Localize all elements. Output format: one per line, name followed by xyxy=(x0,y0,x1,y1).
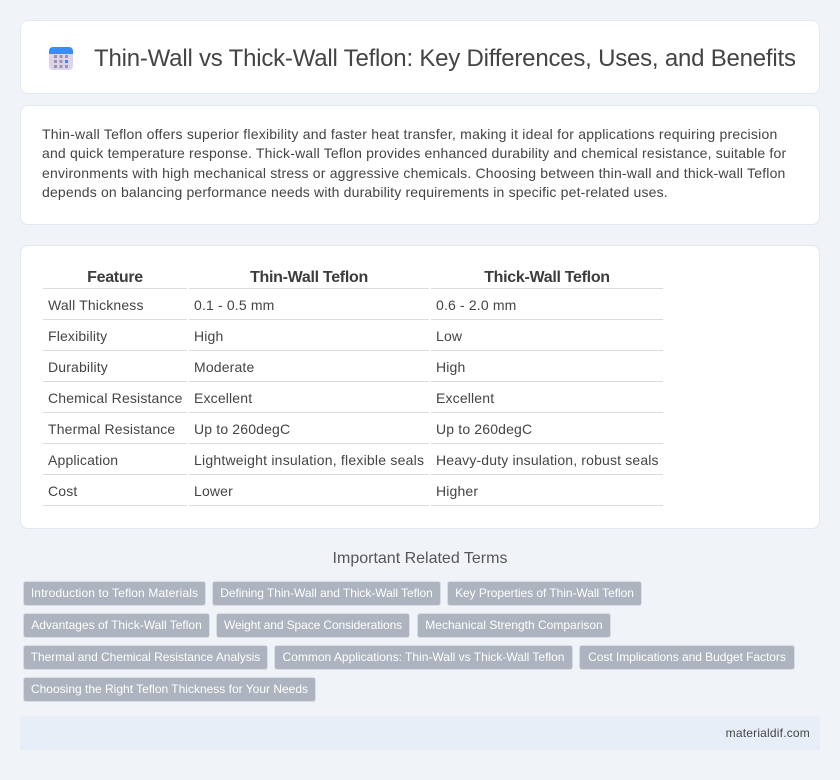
intro text: and quick temperature response. Thick-wall Teflon provides enhanced durability and chemical resistance, suitable for xyxy=(42,145,786,161)
comparison table: Feature xyxy=(87,269,143,286)
comparison table xyxy=(43,269,663,506)
title: Thin-Wall vs Thick-Wall Teflon: Key Differences, Uses, and Benefits xyxy=(94,45,796,72)
panel: title header xyxy=(20,20,820,94)
intro text: depends on balancing performance needs with durability requirements in specific pet-related uses. xyxy=(42,184,668,200)
related term tags: Weight and Space Considerations xyxy=(224,618,402,632)
related term tags: Common Applications: Thin-Wall vs Thick-Wall Teflon xyxy=(283,650,564,664)
comparison table: Up to 260degC xyxy=(194,421,290,437)
comparison table: 0.1 - 0.5 mm xyxy=(194,297,274,313)
comparison table: Moderate xyxy=(194,359,254,375)
related term tags xyxy=(23,581,795,702)
related term tags: Key Properties of Thin-Wall Teflon xyxy=(455,586,634,600)
comparison table: Lightweight insulation, flexible seals xyxy=(194,452,424,468)
intro text: Thin-wall Teflon offers superior flexibility and faster heat transfer, making it ideal for applications requiring precision xyxy=(42,126,777,142)
footer xyxy=(20,716,820,750)
related term tags: Choosing the Right Teflon Thickness for Your Needs xyxy=(31,682,308,696)
icon: calendar xyxy=(49,47,73,70)
panel: introduction xyxy=(20,105,820,225)
comparison table: 0.6 - 2.0 mm xyxy=(436,297,516,313)
related term tags: Cost Implications and Budget Factors xyxy=(588,650,786,664)
comparison table: Lower xyxy=(194,483,233,499)
comparison table: Heavy-duty insulation, robust seals xyxy=(436,452,659,468)
related term tags: Thermal and Chemical Resistance Analysis xyxy=(31,650,260,664)
comparison table: Thick-Wall Teflon xyxy=(484,269,610,286)
comparison table: Cost xyxy=(48,483,77,499)
comparison table: Durability xyxy=(48,359,108,375)
comparison table: Application xyxy=(48,452,118,468)
comparison table: Chemical Resistance xyxy=(48,390,183,406)
comparison table: High xyxy=(436,359,465,375)
comparison table: Excellent xyxy=(194,390,252,406)
heading: related terms: Important Related Terms xyxy=(333,550,507,567)
comparison table: Up to 260degC xyxy=(436,421,532,437)
comparison table: High xyxy=(194,328,223,344)
panel: comparison table xyxy=(20,245,820,529)
related term tags: Introduction to Teflon Materials xyxy=(31,586,198,600)
footer source: materialdif.com xyxy=(726,726,810,740)
comparison table: Excellent xyxy=(436,390,494,406)
related term tags: Defining Thin-Wall and Thick-Wall Teflon xyxy=(220,586,433,600)
comparison table: Thin-Wall Teflon xyxy=(250,269,368,286)
comparison table: Higher xyxy=(436,483,478,499)
related term tags: Advantages of Thick-Wall Teflon xyxy=(31,618,202,632)
intro text xyxy=(42,126,786,200)
comparison table: Wall Thickness xyxy=(48,297,144,313)
comparison table: Flexibility xyxy=(48,328,107,344)
comparison table: Thermal Resistance xyxy=(48,421,175,437)
comparison table: Low xyxy=(436,328,462,344)
related term tags: Mechanical Strength Comparison xyxy=(425,618,603,632)
intro text: environments with high mechanical stress or aggressive chemicals. Choosing between thin-wall and thick-wall Teflon xyxy=(42,165,786,181)
